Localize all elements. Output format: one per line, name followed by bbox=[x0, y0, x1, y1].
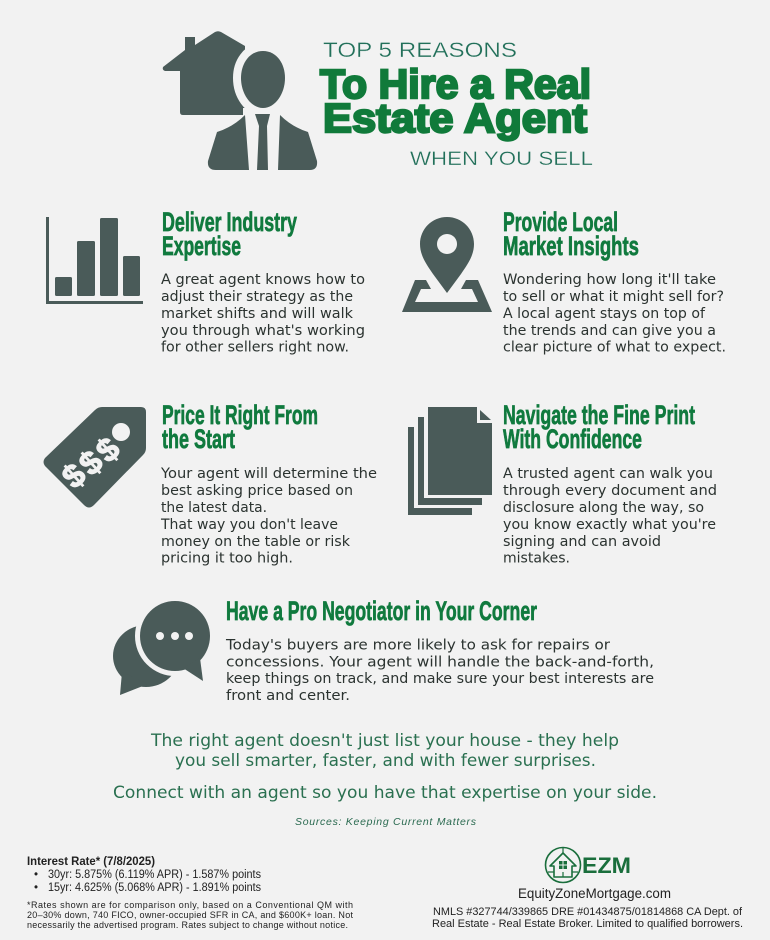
panel: provide local market insights: clear picture of what to expect. bbox=[503, 338, 726, 356]
panel: deliver industry expertise: Expertise bbox=[162, 231, 241, 261]
panel: deliver industry expertise bbox=[46, 207, 365, 356]
panel: deliver industry expertise: adjust their strategy as the bbox=[161, 288, 353, 305]
panel: price it right from the start: the latest data. bbox=[161, 499, 267, 516]
icon: chat bubbles bbox=[113, 601, 210, 695]
panel: deliver industry expertise: A great agent knows how to bbox=[161, 271, 365, 288]
title: To Hire a Real bbox=[320, 61, 591, 107]
title: WHEN YOU SELL bbox=[410, 148, 593, 170]
panel: provide local market insights: Wondering how long it'll take bbox=[503, 271, 716, 288]
panel: deliver industry expertise: market shifts and will walk bbox=[161, 305, 354, 322]
logo: EZM: EZM bbox=[582, 853, 631, 878]
panel: navigate the fine print: signing and can avoid bbox=[503, 533, 661, 550]
interest rates bbox=[27, 856, 261, 894]
panel: pro negotiator: Have a Pro Negotiator in Your Corner bbox=[226, 596, 537, 626]
panel: price it right from the start: the Start bbox=[162, 424, 235, 454]
panel: navigate the fine print: through every document and bbox=[503, 482, 717, 499]
panel: provide local market insights: A local agent stays on top of bbox=[503, 305, 706, 322]
panel: pro negotiator: front and center. bbox=[226, 687, 350, 704]
panel: navigate the fine print: disclosure along the way, so bbox=[503, 499, 704, 516]
icon: price tag bbox=[44, 407, 146, 508]
panel: price it right from the start: Price It Right From bbox=[162, 400, 318, 430]
panel: navigate the fine print bbox=[408, 400, 717, 566]
closing message bbox=[113, 731, 657, 802]
panel: price it right from the start: money on the table or risk bbox=[161, 533, 351, 550]
closing message: Connect with an agent so you have that expertise on your side. bbox=[113, 783, 657, 802]
panel: deliver industry expertise: you through what's working bbox=[161, 322, 365, 339]
panel: navigate the fine print: With Confidence bbox=[503, 424, 642, 454]
panel: provide local market insights: Provide Local bbox=[503, 207, 618, 237]
panel: pro negotiator: concessions. Your agent will handle the back-and-forth, bbox=[226, 654, 654, 670]
icon: price tag: $ bbox=[88, 430, 127, 470]
icon: map pin bbox=[402, 217, 492, 312]
panel: navigate the fine print: you know exactly what you're bbox=[503, 516, 716, 533]
license text bbox=[432, 906, 743, 930]
panel: price it right from the start: pricing it too high. bbox=[161, 550, 293, 566]
interest rates: • bbox=[34, 869, 38, 881]
icon: price tag: $ bbox=[54, 456, 93, 496]
icon: stacked documents bbox=[408, 407, 492, 515]
closing message: The right agent doesn't just list your house - they help bbox=[150, 731, 619, 750]
icon: house and agent bbox=[163, 31, 317, 170]
panel: price it right from the start bbox=[44, 400, 377, 566]
closing message: you sell smarter, faster, and with fewer surprises. bbox=[175, 751, 596, 770]
panel: pro negotiator: Today's buyers are more likely to ask for repairs or bbox=[225, 636, 610, 654]
license text: Real Estate - Real Estate Broker. Limited to qualified borrowers. bbox=[432, 918, 743, 930]
panel: pro negotiator: keep things on track, and make sure your best interests are bbox=[226, 670, 654, 687]
panel: deliver industry expertise: for other sellers right now. bbox=[161, 338, 349, 356]
panel: provide local market insights: the trends and can give you a bbox=[503, 322, 716, 339]
interest rates: • bbox=[34, 882, 38, 894]
rate disclaimer bbox=[27, 900, 353, 930]
panel: price it right from the start: Your agent will determine the bbox=[160, 465, 377, 482]
title: TOP 5 REASONS bbox=[323, 39, 517, 62]
title: Estate Agent bbox=[323, 95, 587, 141]
rate disclaimer: 20–30% down, 740 FICO, owner-occupied SFR in CA, and $600K+ loan. Not bbox=[27, 910, 353, 920]
panel: navigate the fine print: A trusted agent can walk you bbox=[503, 465, 713, 482]
website: EquityZoneMortgage.com bbox=[518, 886, 671, 901]
panel: navigate the fine print: mistakes. bbox=[503, 550, 570, 566]
sources: Sources: Keeping Current Matters bbox=[295, 816, 477, 828]
panel: provide local market insights bbox=[402, 207, 726, 356]
panel: provide local market insights: Market Insights bbox=[503, 231, 639, 261]
panel: provide local market insights: to sell or what it might sell for? bbox=[503, 288, 724, 305]
interest rates: 15yr: 4.625% (5.068% APR) - 1.891% points bbox=[48, 882, 261, 894]
title bbox=[320, 39, 593, 170]
panel: deliver industry expertise: Deliver Industry bbox=[162, 207, 297, 237]
license text: NMLS #327744/339865 DRE #01434875/01814868 CA Dept. of bbox=[433, 906, 743, 918]
logo: EZM bbox=[546, 848, 631, 882]
panel: pro negotiator bbox=[113, 596, 654, 704]
interest rates: 30yr: 5.875% (6.119% APR) - 1.587% points bbox=[48, 869, 261, 881]
interest rates: Interest Rate* (7/8/2025) bbox=[27, 856, 155, 868]
panel: price it right from the start: That way you don't leave bbox=[160, 516, 338, 533]
rate disclaimer: *Rates shown are for comparison only, based on a Conventional QM with bbox=[27, 900, 353, 910]
icon: price tag: $ bbox=[71, 443, 110, 483]
panel: price it right from the start: best asking price based on bbox=[161, 482, 353, 499]
icon: bar chart bbox=[46, 217, 143, 304]
rate disclaimer: necessarily the advertised program. Rates subject to change without notice. bbox=[27, 920, 348, 930]
